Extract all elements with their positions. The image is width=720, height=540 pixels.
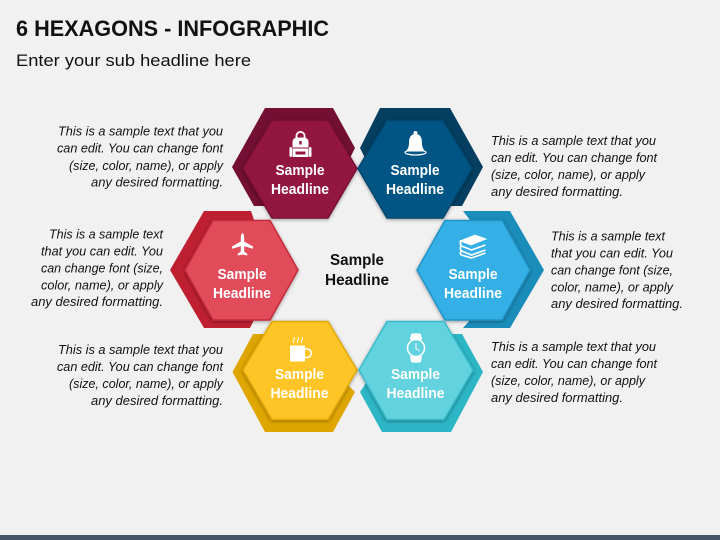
front hexagon (417, 220, 530, 320)
front hexagon (243, 322, 357, 420)
front hexagon (359, 322, 473, 420)
text block: middle-right: that you can edit. You (551, 246, 673, 260)
label: Sample (391, 367, 440, 383)
panel: bottom-right hexagon (359, 322, 483, 432)
front hexagon (243, 120, 357, 218)
text block: bottom-left: (size, color, name), or apply (69, 376, 224, 391)
text block: bottom-right: can edit. You can change font (491, 356, 658, 371)
label: Sample (390, 163, 440, 179)
icon: coffee mug (290, 337, 311, 362)
panel: middle-left hexagon: Headline (213, 286, 271, 302)
text block: bottom-left: any desired formatting. (91, 393, 223, 408)
text block: top-left: This is a sample text that you (58, 124, 223, 138)
panel: top-right hexagon (358, 108, 483, 218)
text block: middle-left: that you can edit. You (41, 244, 163, 258)
label: Sample (218, 267, 266, 283)
text block: middle-right: This is a sample text (551, 228, 666, 244)
back hexagon (232, 334, 355, 432)
text block: top-left: can edit. You can change font (57, 140, 224, 156)
text block: top-left: any desired formatting. (91, 174, 223, 190)
text block: middle-right: color, name), or apply (551, 280, 674, 294)
text block: top-right: can edit. You can change font (491, 150, 658, 165)
panel: bottom-left hexagon: Headline (270, 386, 328, 402)
text block: middle-left: color, name), or apply (41, 278, 164, 292)
panel: bottom-right hexagon: Headline (386, 386, 444, 402)
text block: top-left: (size, color, name), or apply (69, 158, 224, 173)
text block: bottom-right: any desired formatting. (491, 390, 623, 405)
label: Sample (276, 163, 324, 179)
label: Sample (448, 267, 498, 283)
back hexagon (232, 108, 355, 206)
text block: bottom-left: This is a sample text that you (58, 342, 223, 357)
back hexagon (360, 334, 483, 432)
front hexagon (358, 120, 472, 218)
title: 6 HEXAGONS - INFOGRAPHIC (16, 16, 329, 41)
center label: Sample (330, 252, 384, 269)
panel: top-right hexagon: Headline (386, 182, 444, 198)
label: Sample (275, 367, 324, 383)
text block: top-right: (size, color, name), or apply (491, 167, 646, 182)
text block: middle-left: This is a sample text (49, 226, 164, 242)
bottom bar (0, 535, 720, 540)
icon: wristwatch (408, 333, 424, 363)
icon: stacked books (460, 236, 486, 258)
back hexagon (170, 211, 254, 328)
center label (325, 252, 389, 289)
front hexagon (185, 220, 298, 320)
text block: middle-left: can change font (size, (41, 260, 163, 276)
subtitle: Enter your sub headline here (16, 51, 251, 70)
text block: middle-right: can change font (size, (551, 262, 673, 278)
text block: middle-right (551, 228, 683, 311)
icon: backpack (290, 131, 312, 157)
center label: Headline (325, 272, 389, 289)
back hexagon (463, 211, 544, 328)
text block: top-right: This is a sample text that you (491, 133, 656, 148)
text block: bottom-left (57, 342, 224, 408)
panel: bottom-left hexagon (232, 322, 357, 432)
text block: middle-right: any desired formatting. (551, 296, 683, 311)
text block: middle-left: any desired formatting. (31, 294, 163, 309)
panel: top-left hexagon (232, 108, 357, 218)
text block: top-right (491, 133, 658, 199)
icon: bell (405, 131, 426, 155)
panel: middle-right hexagon (417, 211, 544, 328)
icon: airplane (232, 233, 253, 256)
text block: bottom-right (491, 339, 658, 405)
text block: middle-left (31, 226, 164, 309)
text block: bottom-right: This is a sample text that you (491, 339, 656, 354)
panel: middle-left hexagon (170, 211, 298, 328)
text block: top-left (57, 124, 224, 190)
text block: top-right: any desired formatting. (491, 184, 623, 199)
text block: bottom-right: (size, color, name), or apply (491, 373, 646, 388)
panel: top-left hexagon: Headline (271, 182, 329, 198)
back hexagon (360, 108, 483, 206)
text block: bottom-left: can edit. You can change font (57, 359, 224, 374)
panel: middle-right hexagon: Headline (444, 286, 502, 302)
